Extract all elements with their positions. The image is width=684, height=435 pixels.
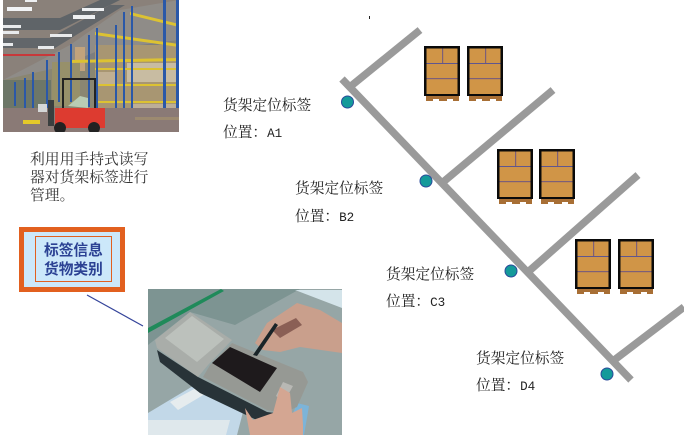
callout: tag information: 货物类别 bbox=[44, 260, 103, 278]
pallets: row C bbox=[575, 239, 654, 294]
pallets: row A bbox=[424, 46, 503, 101]
marker: A1 bbox=[342, 96, 354, 108]
label: D4: 位置：D4 bbox=[476, 374, 535, 395]
connector line: callout to handheld bbox=[87, 295, 143, 326]
callout: tag information: 标签信息 bbox=[44, 241, 103, 259]
marker: C3 bbox=[505, 265, 517, 277]
label: A1: 货架定位标签 bbox=[223, 94, 311, 115]
text: handheld reader note: 管理。 bbox=[30, 184, 74, 205]
pallets: row B bbox=[497, 149, 575, 204]
label: B2: 货架定位标签 bbox=[295, 177, 383, 198]
callout: tag information bbox=[22, 230, 122, 290]
marker: B2 bbox=[420, 175, 432, 187]
label: B2 bbox=[295, 177, 383, 226]
text: handheld reader note bbox=[30, 148, 149, 205]
label: C3 bbox=[386, 263, 474, 311]
label: D4: 货架定位标签 bbox=[476, 347, 564, 368]
label: B2: 位置：B2 bbox=[295, 205, 354, 226]
text: handheld reader note: 器对货架标签进行 bbox=[30, 166, 149, 187]
label: A1: 位置：A1 bbox=[223, 121, 282, 142]
marker: D4 bbox=[601, 368, 613, 380]
label: C3: 货架定位标签 bbox=[386, 263, 474, 284]
photo: warehouse with forklift bbox=[3, 0, 179, 134]
rack aisle: main and branch lines bbox=[342, 30, 684, 380]
label: C3: 位置：C3 bbox=[386, 290, 445, 311]
label: D4 bbox=[476, 347, 564, 395]
label: A1 bbox=[223, 94, 311, 142]
photo: handheld reader in hands bbox=[148, 289, 342, 435]
small mark bbox=[369, 16, 370, 19]
text: handheld reader note: 利用用手持式读写 bbox=[30, 148, 149, 169]
